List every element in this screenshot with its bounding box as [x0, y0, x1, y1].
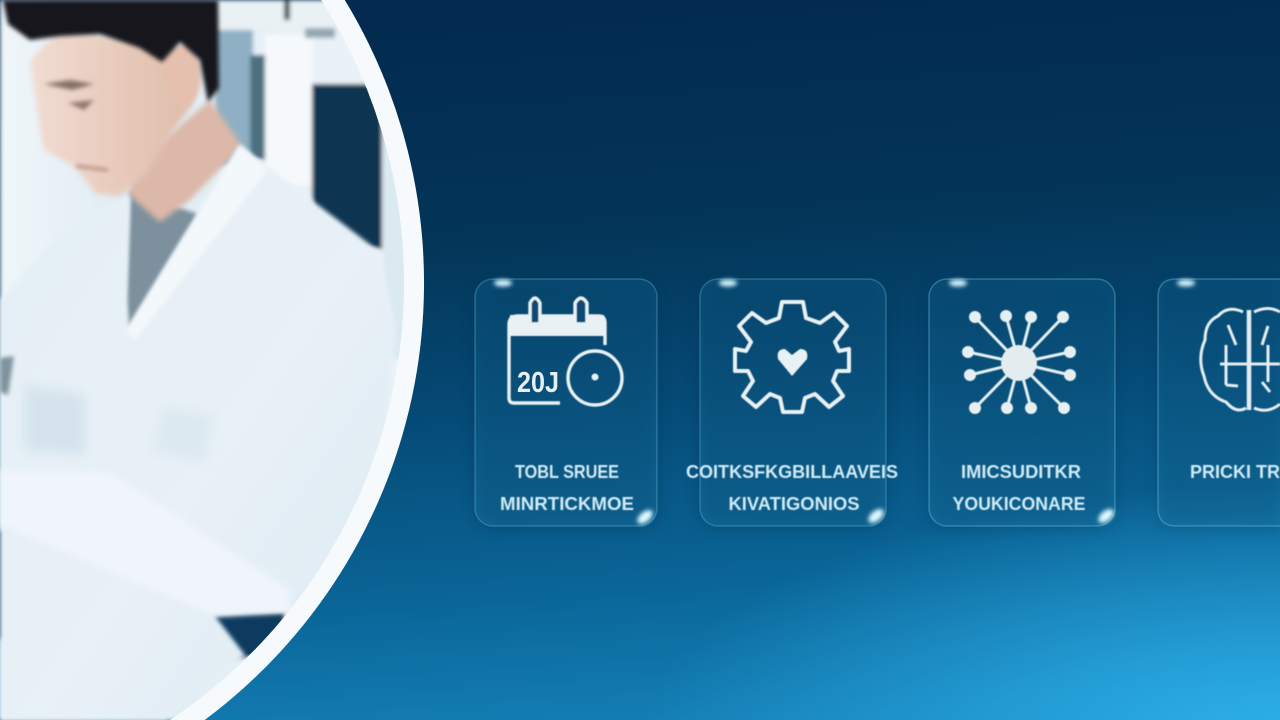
photo: scientist in a white lab coat inside circular frame: [0, 0, 430, 720]
photo: ear: [176, 44, 203, 106]
photo: grey shirt: [126, 190, 200, 330]
panel: card 3: [929, 279, 1116, 528]
panel: card 2: [686, 279, 898, 528]
photo backdrop: laboratory wall and equipment: [0, 0, 430, 720]
card 2 label: COITKSFKGBILLAAVEIS: [686, 462, 898, 482]
photo: eyebrow and eye: [44, 80, 108, 170]
card 1 label: TOBL SRUEE: [515, 462, 619, 482]
icon text: calendar year: 20J: [517, 367, 559, 399]
panel: card 1: [475, 279, 657, 528]
icon: calendar with clock: [509, 298, 622, 405]
photo: neck: [128, 100, 242, 222]
card 4 label: PRICKI TR: [1190, 462, 1280, 482]
card 1 sublabel: MINRTICKMOE: [500, 494, 634, 514]
panel: card 4: [1158, 279, 1280, 528]
photo: white lab coat: [0, 145, 396, 720]
icon: gearwheel with heart: [735, 302, 849, 412]
circular white frame: [170, 0, 424, 720]
icon: molecule network: [962, 310, 1076, 414]
photo: hair: [3, 0, 219, 102]
icon: brain: [1201, 308, 1280, 410]
card 3 sublabel: YOUKICONARE: [952, 494, 1086, 514]
card 3 label: IMICSUDITKR: [961, 462, 1081, 482]
photo: face: [30, 30, 192, 196]
card 2 sublabel: KIVATIGONIOS: [728, 494, 860, 514]
